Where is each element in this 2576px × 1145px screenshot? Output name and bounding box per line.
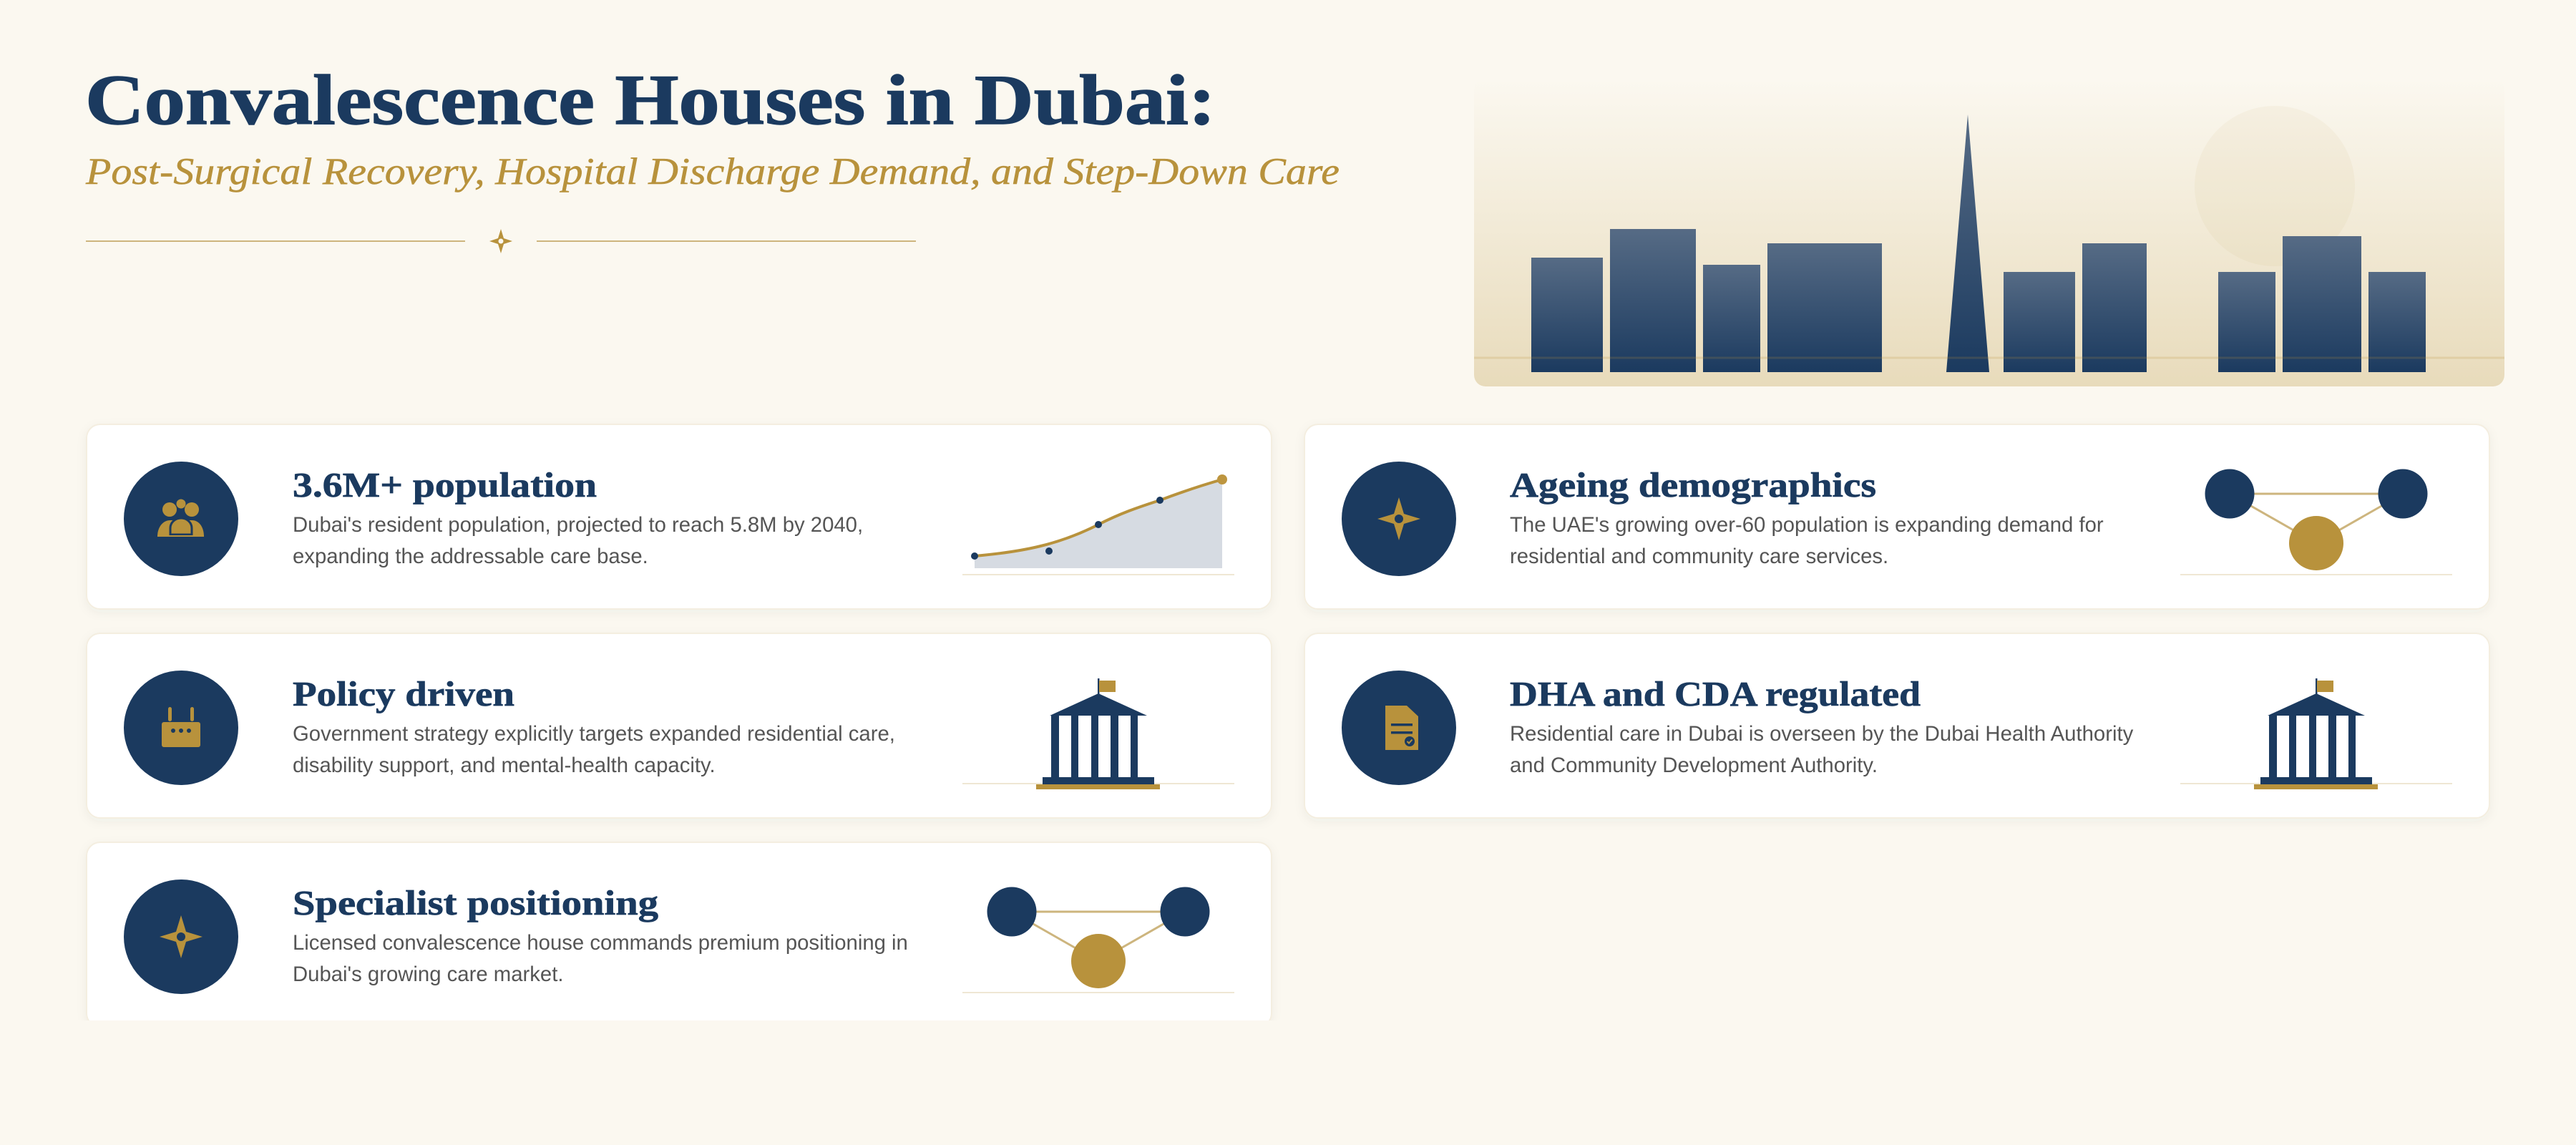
card: Specialist positioning bbox=[87, 842, 1272, 1027]
description: Dubai's growing care market. bbox=[293, 963, 563, 986]
header bbox=[85, 60, 1340, 253]
card: DHA and CDA regulated bbox=[1304, 633, 2489, 818]
icon: people bbox=[124, 462, 238, 576]
card background bbox=[87, 842, 1272, 1027]
network diagram bbox=[962, 887, 1234, 993]
description: residential and community care services. bbox=[1510, 545, 1888, 568]
buildings middle group bbox=[2004, 243, 2147, 372]
description: Residential care in Dubai is overseen by the Dubai Health Authority bbox=[1510, 722, 2133, 746]
heading: Ageing demographics bbox=[1510, 465, 1876, 505]
icon: document bbox=[1342, 671, 1456, 785]
card background bbox=[87, 424, 1272, 609]
network diagram bbox=[2180, 469, 2452, 575]
description: and Community Development Authority. bbox=[1510, 754, 1878, 777]
heading: 3.6M+ population bbox=[293, 465, 597, 505]
card area bbox=[87, 424, 2489, 1027]
description: expanding the addressable care base. bbox=[293, 545, 648, 568]
government building bbox=[962, 678, 1234, 789]
title: Convalescence Houses in Dubai: bbox=[85, 60, 1216, 140]
tower spire bbox=[1946, 114, 1989, 372]
sky panel bbox=[1474, 79, 2504, 386]
heading: DHA and CDA regulated bbox=[1510, 674, 1921, 713]
ornament divider bbox=[86, 229, 916, 253]
description: The UAE's growing over-60 population is expanding demand for bbox=[1510, 513, 2104, 537]
growth chart bbox=[962, 474, 1234, 575]
card: Policy driven bbox=[87, 633, 1272, 818]
card background bbox=[1304, 424, 2489, 609]
subtitle: Post-Surgical Recovery, Hospital Discharge Demand, and Step-Down Care bbox=[85, 151, 1340, 193]
description: Government strategy explicitly targets expanded residential care, bbox=[293, 722, 895, 746]
buildings right group bbox=[2218, 236, 2426, 372]
icon: router bbox=[124, 671, 238, 785]
sun bbox=[2195, 106, 2355, 266]
buildings left group bbox=[1531, 229, 1882, 372]
card background bbox=[87, 633, 1272, 818]
government building bbox=[2180, 678, 2452, 789]
card background bbox=[1304, 633, 2489, 818]
card: 3.6M+ population bbox=[87, 424, 1272, 609]
description: disability support, and mental-health capacity. bbox=[293, 754, 716, 777]
card: Ageing demographics bbox=[1304, 424, 2489, 609]
skyline illustration bbox=[1474, 79, 2504, 386]
heading: Specialist positioning bbox=[293, 883, 659, 922]
description: Licensed convalescence house commands premium positioning in bbox=[293, 931, 908, 955]
icon: star bbox=[1342, 462, 1456, 576]
heading: Policy driven bbox=[293, 674, 514, 713]
ground line bbox=[1474, 356, 2504, 359]
description: Dubai's resident population, projected to reach 5.8M by 2040, bbox=[293, 513, 863, 537]
icon: star bbox=[124, 880, 238, 994]
